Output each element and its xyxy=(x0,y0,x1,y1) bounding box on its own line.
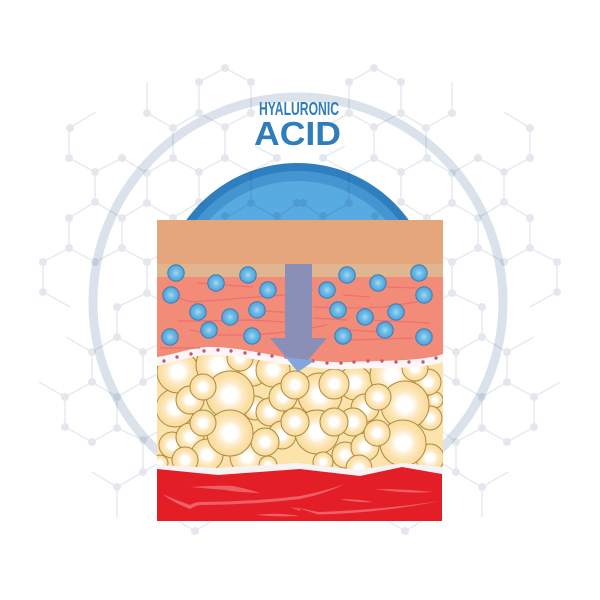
layer: white membrane xyxy=(157,347,443,369)
layer: tan epidermis xyxy=(157,264,443,277)
layer: fat tissue xyxy=(157,346,443,470)
layer: salmon dermis base xyxy=(157,277,443,367)
layer: muscle xyxy=(157,467,442,521)
arrow xyxy=(270,264,327,372)
layer: salmon dermis xyxy=(157,277,443,362)
layer: upper epidermis xyxy=(157,220,443,264)
dermis fibres xyxy=(160,283,430,348)
ring xyxy=(93,97,503,507)
layer: white band above muscle xyxy=(157,463,443,476)
title line: hyaluronic: HYALURONIC xyxy=(259,99,339,119)
title xyxy=(254,99,341,153)
skin cross-section xyxy=(152,220,444,521)
membrane dots xyxy=(162,348,438,365)
dome xyxy=(186,163,409,220)
arrow tip over fat xyxy=(283,354,314,372)
infographic: hyaluronic acid skin diagram xyxy=(39,64,561,535)
hyaluronic acid molecules xyxy=(162,265,432,345)
title line: acid: ACID xyxy=(254,116,341,153)
molecular network xyxy=(39,64,561,535)
muscle streaks xyxy=(162,484,440,516)
